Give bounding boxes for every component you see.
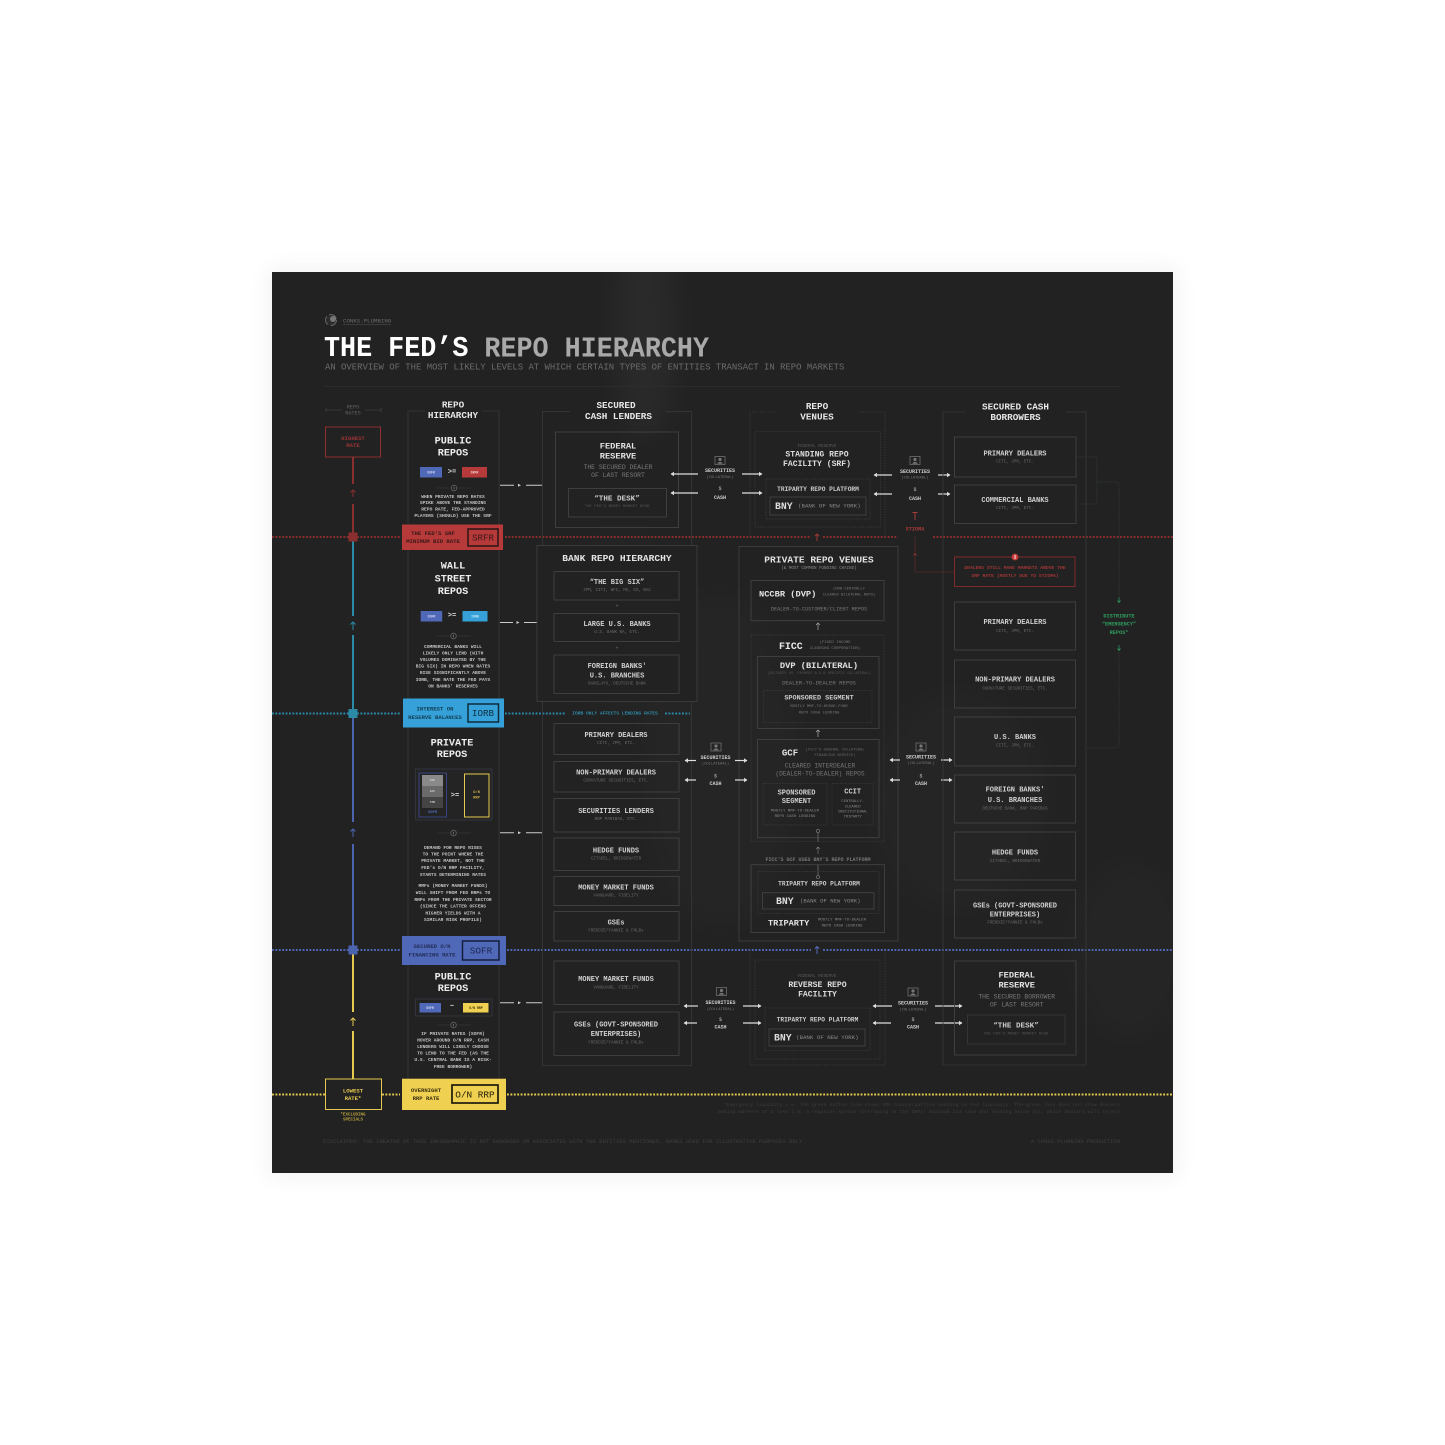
flow: securities and cash, middle right: CASH xyxy=(915,781,927,787)
large us banks box: U.S. BANK NA, ETC. xyxy=(594,631,640,635)
public repos tier: >= xyxy=(448,469,456,477)
wall street repos tier: COMMERCIAL BANKS WILL xyxy=(424,644,482,650)
heading: CASH LENDERS xyxy=(585,411,652,422)
FICC panel: CLEARING CORPORATION) xyxy=(810,646,860,651)
triparty box: MOSTLY MMF-TO-DEALER xyxy=(818,918,867,922)
connector arrows from hierarchy to lenders xyxy=(500,484,542,1004)
GCF box: SPONSORED xyxy=(778,790,815,798)
private repos tier: FED's O/N RRP FACILITY, xyxy=(421,865,485,871)
flow: securities and cash, top left: SECURITIES xyxy=(705,468,735,474)
SOFR rate label xyxy=(402,936,506,965)
heading: HIERARCHY xyxy=(428,410,479,421)
private repos tier: REPOS xyxy=(437,750,467,761)
public repos tier: PLAYERS (SHOULD) USE THE SRF xyxy=(414,513,492,519)
GCF to tripartry connector xyxy=(816,829,820,878)
GSEs borrower: FREDDIE/FANNIE & FHLBs xyxy=(987,920,1043,925)
private repos tier: PRIVATE MARKET, NOT THE xyxy=(421,858,485,864)
dotted rate lines xyxy=(272,537,1173,1094)
standing repo facility panel xyxy=(755,432,881,527)
wall street repos tier: BIG SIX) IN REPO WHEN RATES xyxy=(416,664,490,670)
IORB note: IORB ONLY AFFECTS LENDING RATES xyxy=(572,710,658,716)
flow: securities and cash, top right xyxy=(874,456,950,502)
federal reserve borrower: THE FED'S MONEY MARKET DESK xyxy=(984,1031,1049,1036)
primary dealers borrower: PRIMARY DEALERS xyxy=(983,619,1047,627)
IORB rate label xyxy=(403,698,504,728)
NCCBR box: CLEARED BILATERAL REPO) xyxy=(823,592,875,597)
GSEs lender: GSEs xyxy=(608,920,624,928)
private repos tier: DVP xyxy=(430,779,435,782)
hedge funds borrower: HEDGE FUNDS xyxy=(992,850,1038,858)
public repos lower tier: PUBLIC xyxy=(435,972,471,983)
public repos lower tier: U.S. CENTRAL BANK IS A RISK- xyxy=(414,1057,492,1063)
triparty box xyxy=(751,865,884,932)
federal reserve lender box: OF LAST RESORT xyxy=(591,472,645,479)
reverse repo facility panel: TRIPARTY REPO PLATFORM xyxy=(777,1016,859,1023)
emergency repos green path: DISTRIBUTE xyxy=(1103,613,1135,619)
flow: securities and cash, bottom right: SECURITIES xyxy=(898,1000,928,1006)
column: secured cash borrowers xyxy=(943,402,1086,1065)
private repos tier: TPR xyxy=(430,801,435,804)
private repos tier: SOFR xyxy=(428,811,438,815)
federal reserve lender box xyxy=(556,432,678,528)
GCF box xyxy=(758,740,879,838)
bank repo hierarchy panel: + xyxy=(615,603,619,609)
public repos lower tier: TO LEND TO THE FED (AS THE xyxy=(417,1051,489,1057)
DVP bilateral box: (DELIVERY VS. PAYMENT A.K.A SPECIFIC COLLATERAL) xyxy=(767,671,871,676)
private repos tier: WILL SHIFT FROM FED RRPs TO xyxy=(416,890,490,896)
footnote: making markets at a loss i.e. a negative spread (borrowing at the SRFs' minimum bid rate and lending below it), which dealers will reject xyxy=(718,1109,1120,1115)
highest rate box: HIGHEST xyxy=(341,435,365,442)
flow: securities and cash, middle right: SECURITIES xyxy=(906,754,936,760)
heading: REPO xyxy=(806,401,829,412)
GSEs borrower xyxy=(954,890,1076,938)
public repos tier: REPOS xyxy=(438,448,468,459)
NCCBR box xyxy=(751,580,884,621)
bank repo hierarchy panel: BANK REPO HIERARCHY xyxy=(562,553,672,564)
triparty box: BNY xyxy=(776,896,794,907)
SOFR rate label: FINANCING RATE xyxy=(408,952,456,959)
wall street repos tier: RISE SIGNIFICANTLY ABOVE xyxy=(420,670,486,676)
primary dealers lender: PRIMARY DEALERS xyxy=(584,732,648,740)
DVP bilateral box: REPO CASH LENDING xyxy=(799,711,840,715)
primary dealers lender: CITI, JPM, ETC. xyxy=(597,742,635,746)
DVP bilateral box: SPONSORED SEGMENT xyxy=(784,695,854,703)
primary dealers borrower top: CITI, JPM, ETC. xyxy=(996,460,1034,464)
flow: securities and cash, bottom left: CASH xyxy=(714,1024,727,1030)
public repos lower tier: ~ xyxy=(450,1003,454,1011)
heading: VENUES xyxy=(800,412,834,423)
bank repo hierarchy panel: + xyxy=(615,645,619,651)
O/N RRP rate label: RRP RATE xyxy=(413,1095,440,1102)
private repos tier: GCF xyxy=(430,790,435,793)
GCF box: SEGMENT xyxy=(782,798,811,806)
flow: securities and cash, top right: CASH xyxy=(909,496,921,502)
heading: SECURED CASH xyxy=(982,402,1049,413)
public repos lower tier: SOFR xyxy=(426,1006,434,1010)
us banks borrower xyxy=(954,717,1076,766)
triparty box: (BANK OF NEW YORK) xyxy=(800,897,860,904)
flow: securities and cash, top left: $ xyxy=(718,486,722,492)
hedge funds borrower xyxy=(954,832,1076,880)
level-up arrows on venue lines xyxy=(815,534,819,954)
title: THE FED’S REPO HIERARCHY xyxy=(324,332,710,365)
GCF box: FINANCING SERVICE) xyxy=(814,753,856,758)
public repos tier xyxy=(414,436,492,519)
DVP bilateral box: DVP (BILATERAL) xyxy=(780,661,858,671)
lowest rate box xyxy=(326,1079,382,1122)
flow: securities and cash, middle left: SECURITIES xyxy=(700,755,731,761)
flow: securities and cash, top left xyxy=(671,456,762,501)
reverse repo facility panel xyxy=(750,950,885,1065)
flow: securities and cash, top left: (COLLATERAL) xyxy=(706,475,734,480)
DVP bilateral box: DEALER-TO-DEALER REPOS xyxy=(782,680,857,687)
SRFR rate label: THE FED'S SRF xyxy=(411,530,455,537)
brand logo and handle xyxy=(326,314,392,326)
standing repo facility panel: (BANK OF NEW YORK) xyxy=(798,502,861,509)
public repos tier: REPO RATE, FED-APPROVED xyxy=(421,507,485,513)
federal reserve lender box: FEDERAL xyxy=(600,442,636,452)
dealer stigma callout: SRF RATE (MOSTLY DUE TO STIGMA) xyxy=(971,573,1059,579)
FICC panel: (FIXED INCOME xyxy=(819,640,851,645)
federal reserve borrower: OF LAST RESORT xyxy=(990,1002,1044,1009)
SRFR rate label: SRFR xyxy=(472,533,495,544)
flow: securities and cash, middle right xyxy=(890,743,952,787)
federal reserve lender box: “THE DESK” xyxy=(594,496,640,504)
GCF box: (DEALER-TO-DEALER) REPOS xyxy=(775,771,865,778)
foreign banks box: FOREIGN BANKS' xyxy=(588,663,646,671)
O/N RRP rate label: O/N RRP xyxy=(455,1089,495,1100)
GCF box: (FICC'S GENERAL COLLATERAL xyxy=(805,747,865,752)
private repos tier: (SINCE THE LATTER OFFERS xyxy=(420,903,486,909)
column: repo venues xyxy=(739,401,898,1065)
flow: securities and cash, top right: (COLLATERAL) xyxy=(901,475,929,480)
O/N RRP rate label xyxy=(402,1079,506,1110)
heading xyxy=(585,400,652,422)
public repos lower tier: FREE BORROWER) xyxy=(434,1064,472,1070)
securities lenders: BNP PARIBAS, ETC. xyxy=(595,818,637,822)
flow: securities and cash, top left: CASH xyxy=(714,495,726,501)
hedge funds lender: CITADEL, BRIDGEWATER xyxy=(591,857,642,861)
heading: REPO xyxy=(442,400,465,411)
footnote: *Emergency liquidity i.e. the green dotted line shows SRF counterparties seeding on Fed liquidity. The green line does not show dealers xyxy=(724,1102,1120,1108)
poster background xyxy=(272,220,1190,1173)
poster shadow xyxy=(268,268,1177,1177)
hedge funds lender xyxy=(554,838,679,870)
commercial banks borrower xyxy=(954,485,1076,524)
standing repo facility panel: FACILITY (SRF) xyxy=(783,460,851,469)
flow: securities and cash, middle left: $ xyxy=(714,773,717,779)
private repos tier: STARTS DETERMINING RATES xyxy=(420,872,486,878)
wall street repos tier: VOLUMES DOMINATED BY THE xyxy=(420,657,486,663)
standing repo facility panel: STANDING REPO xyxy=(785,450,849,459)
IORB rate label: INTEREST ON xyxy=(417,706,453,713)
private repos tier: PRIVATE xyxy=(431,738,473,749)
column: secured cash lenders xyxy=(537,400,697,1065)
primary dealers borrower top xyxy=(954,437,1076,477)
GCF box: TRIPARTY xyxy=(844,815,863,819)
private repos tier: RRPs FROM THE PRIVATE SECTOR xyxy=(414,897,492,903)
public repos lower tier: REPOS xyxy=(438,984,468,995)
non-primary dealers lender xyxy=(554,762,679,792)
production credit: A CONKS.PLUMBING PRODUCTION xyxy=(1031,1138,1120,1145)
GSEs lender: FREDDIE/FANNIE & FHLBs xyxy=(588,928,644,933)
primary dealers borrower: CITI, JPM, ETC. xyxy=(996,630,1034,634)
private repos tier: >= xyxy=(451,792,459,800)
public repos tier: SRFR xyxy=(471,470,478,474)
highest rate box: RATE xyxy=(346,442,360,449)
footnote xyxy=(718,1102,1120,1115)
lowest rate box: *EXCLUDING xyxy=(340,1112,366,1117)
flow: securities and cash, bottom left xyxy=(684,988,761,1030)
reverse repo facility panel: FEDERAL RESERVE xyxy=(798,974,837,979)
GCF box: CENTRALLY- xyxy=(841,800,864,804)
IORB rate label: IORB xyxy=(472,708,495,719)
stigma marker xyxy=(906,512,954,572)
wall street repos tier: WALL xyxy=(441,561,465,572)
flow: securities and cash, bottom right: (COLLATERAL) xyxy=(899,1007,927,1012)
flow: securities and cash, middle right: (COLLATERAL) xyxy=(907,761,935,766)
SRFR rate label: MINIMUM BID RATE xyxy=(406,538,460,545)
emergency repos green path: “EMERGENCY” xyxy=(1102,621,1136,627)
GSEs borrower: GSEs (GOVT-SPONSORED xyxy=(973,903,1057,911)
private repos tier: DEMAND FOR REPO RISES xyxy=(424,845,482,851)
lowest rate box: SPECIALS xyxy=(343,1118,364,1122)
emergency repos green path xyxy=(1076,457,1136,748)
private repos tier: SIMILAR RISK PROFILE) xyxy=(424,917,482,923)
triparty box: REPO CASH LENDING xyxy=(822,924,863,928)
GSEs lower lender: ENTERPRISES) xyxy=(591,1031,641,1039)
GCF box: REPO CASH LENDING xyxy=(775,815,816,819)
federal reserve borrower: THE SECURED BORROWER xyxy=(978,994,1055,1001)
non-primary dealers borrower xyxy=(954,660,1076,708)
private repo venues panel xyxy=(739,546,898,941)
GSEs lender xyxy=(554,912,679,941)
foreign banks borrower xyxy=(954,775,1076,823)
heading xyxy=(428,400,479,421)
NCCBR box: NCCBR (DVP) xyxy=(759,589,816,599)
primary dealers borrower top: PRIMARY DEALERS xyxy=(983,451,1047,459)
primary dealers borrower xyxy=(954,602,1076,650)
federal reserve borrower: “THE DESK” xyxy=(993,1023,1039,1031)
IORB rate label: RESERVE BALANCES xyxy=(408,714,462,721)
GCF box: INSTITUTIONAL xyxy=(838,810,868,814)
private repos tier: O/N xyxy=(473,790,481,795)
public repos tier: SPIKE ABOVE THE STANDING xyxy=(420,500,486,506)
foreign banks borrower: FOREIGN BANKS' xyxy=(986,787,1044,795)
securities lenders: SECURITIES LENDERS xyxy=(578,808,654,816)
federal reserve borrower: RESERVE xyxy=(998,981,1035,991)
big six box: JPM, CITI, WFC, MS, GS, BAC xyxy=(583,589,651,593)
non-primary dealers lender: CURVATURE SECURITIES, ETC. xyxy=(583,779,649,783)
federal reserve borrower xyxy=(954,961,1076,1055)
column: repo rates axis xyxy=(326,404,382,1122)
private repo venues panel: (& MOST COMMON FUNDING CHAINS) xyxy=(781,566,857,571)
private repos tier: RRP xyxy=(473,796,481,800)
flow: securities and cash, middle left: CASH xyxy=(709,781,722,787)
big six box: “THE BIG SIX” xyxy=(590,579,644,587)
FICC panel: FICC xyxy=(779,641,803,652)
wall street repos tier: IORB, THE RATE THE FED PAYS xyxy=(416,677,490,683)
primary dealers lender xyxy=(554,724,679,754)
public repos lower tier: LENDERS WILL LIKELY CHOOSE xyxy=(417,1044,489,1050)
federal reserve borrower: FEDERAL xyxy=(998,971,1035,981)
money market funds lower lender: VANGUARD, FIDELITY xyxy=(593,986,639,990)
private repo venues panel: FICC'S GCF USES BNY'S REPO PLATFORM xyxy=(765,857,871,863)
public repos tier: PUBLIC xyxy=(435,436,471,447)
foreign banks box xyxy=(554,655,679,694)
lowest rate box: RATE* xyxy=(345,1095,361,1102)
brand logo and handle: CONKS.PLUMBING xyxy=(343,317,392,324)
repo rates heading xyxy=(326,404,381,416)
wall street repos tier: ON BANKS' RESERVES xyxy=(428,683,478,689)
DVP bilateral box: MOSTLY MMF-TO-HEDGE-FUND xyxy=(790,705,848,709)
reverse repo facility panel: FACILITY xyxy=(798,990,837,999)
flow: securities and cash, middle left xyxy=(685,743,747,787)
repo rates heading: RATES xyxy=(345,410,361,416)
GCF box: CLEARED INTERDEALER xyxy=(785,763,856,770)
flow: securities and cash, top right: SECURITIES xyxy=(900,469,930,475)
private repo venues panel: PRIVATE REPO VENUES xyxy=(764,554,874,565)
flow: securities and cash, bottom right: CASH xyxy=(907,1024,919,1030)
non-primary dealers lender: NON-PRIMARY DEALERS xyxy=(576,770,656,778)
GCF box: MOSTLY MMF-TO-DEALER xyxy=(771,809,820,813)
flow: securities and cash, bottom left: (COLLATERAL) xyxy=(707,1007,734,1012)
wall street repos tier: LIKELY ONLY LEND (WITH xyxy=(423,650,484,656)
large us banks box: LARGE U.S. BANKS xyxy=(583,621,651,629)
repo rates heading: REPO xyxy=(347,404,359,410)
foreign banks borrower: U.S. BRANCHES xyxy=(988,797,1042,805)
large us banks box xyxy=(554,614,679,642)
NCCBR box: DEALER-TO-CUSTOMER/CLIENT REPOS xyxy=(771,606,867,612)
wall street repos tier: SOFR xyxy=(428,614,435,618)
public repos tier: SOFR xyxy=(427,470,435,474)
flow: securities and cash, bottom left: SECURITIES xyxy=(705,1000,736,1006)
private repos tier: MMFs (MONEY MARKET FUNDS) xyxy=(419,883,487,889)
wall street repos tier xyxy=(416,561,490,689)
emergency repos green path: REPOS* xyxy=(1110,630,1128,636)
stigma marker: STIGMA xyxy=(906,526,925,532)
disclaimer: DISCLAIMER: THE CREATOR OF THIS INFOGRAPHIC IS NOT ENDORSED OR ASSOCIATED WITH THE ENTITIES MENTIONED. NAMES USED FOR ILLUSTRATIVE PURPOSES ONLY. xyxy=(323,1138,806,1145)
flow: securities and cash, bottom right: $ xyxy=(911,1017,915,1023)
non-primary dealers borrower: NON-PRIMARY DEALERS xyxy=(975,677,1055,685)
GCF box: CCIT xyxy=(844,789,861,797)
public repos lower tier: O/N RRP xyxy=(469,1006,483,1010)
public repos lower tier xyxy=(414,972,492,1070)
flow: securities and cash, top right: $ xyxy=(913,487,917,493)
non-primary dealers borrower: CURVATURE SECURITIES, ETC. xyxy=(982,687,1048,691)
standing repo facility panel: TRIPARTY REPO PLATFORM xyxy=(777,486,859,493)
O/N RRP rate label: OVERNIGHT xyxy=(411,1087,442,1094)
public repos lower tier: HOVER AROUND O/N RRP, CASH xyxy=(417,1038,489,1044)
hedge funds lender: HEDGE FUNDS xyxy=(593,848,639,856)
triparty box: TRIPARTY xyxy=(768,918,810,928)
money market funds lender xyxy=(554,876,679,906)
private repos tier: TO THE POINT WHERE THE xyxy=(423,852,484,858)
private repos tier: HIGHER YIELDS WITH A xyxy=(425,910,481,916)
foreign banks box: BARCLAYS, DEUTSCHE BANK xyxy=(588,682,646,686)
foreign banks borrower: DEUTSCHE BANK, BNP PARIBAS xyxy=(982,807,1048,811)
us banks borrower: CITI, JPM, ETC. xyxy=(996,744,1034,748)
GCF box: CLEARED xyxy=(845,805,861,809)
SRFR rate label xyxy=(402,524,503,550)
public repos tier: WHEN PRIVATE REPO RATES xyxy=(421,494,485,500)
federal reserve lender box: RESERVE xyxy=(600,452,636,462)
rate axis line xyxy=(350,457,356,1079)
SOFR rate label: SECURED O/N xyxy=(414,943,450,950)
SOFR rate label: SOFR xyxy=(470,945,493,956)
bank repo hierarchy panel xyxy=(537,546,697,702)
public repos lower tier: IF PRIVATE RATES (SOFR) xyxy=(421,1031,485,1037)
commercial banks borrower: COMMERCIAL BANKS xyxy=(981,497,1049,505)
wall street repos tier: IORB xyxy=(471,614,479,618)
flow: securities and cash, bottom left: $ xyxy=(719,1017,722,1023)
money market funds lower lender xyxy=(554,961,679,1004)
heading xyxy=(982,402,1049,423)
money market funds lender: MONEY MARKET FUNDS xyxy=(578,885,654,893)
securities lenders xyxy=(554,798,679,832)
GSEs lower lender: GSEs (GOVT-SPONSORED xyxy=(574,1022,658,1030)
big six box xyxy=(554,572,679,600)
reverse repo facility panel: BNY xyxy=(774,1032,792,1043)
hedge funds borrower: CITADEL, BRIDGEWATER xyxy=(990,860,1041,864)
wall street repos tier: >= xyxy=(448,612,456,620)
FICC panel xyxy=(751,635,884,842)
reverse repo facility panel: REVERSE REPO xyxy=(788,981,847,990)
flow: securities and cash, bottom right xyxy=(873,988,962,1030)
commercial banks borrower: CITI, JPM, ETC. xyxy=(996,507,1034,511)
GSEs lower lender xyxy=(554,1012,679,1056)
highest rate box xyxy=(326,427,380,457)
us banks borrower: U.S. BANKS xyxy=(994,734,1036,742)
federal reserve lender box: THE SECURED DEALER xyxy=(583,464,653,471)
flow: securities and cash, middle left: (COLLATERAL) xyxy=(702,761,729,766)
heading: BORROWERS xyxy=(990,412,1041,423)
heading: SECURED xyxy=(596,400,636,411)
reverse repo facility panel: (BANK OF NEW YORK) xyxy=(796,1034,859,1041)
GSEs borrower: ENTERPRISES) xyxy=(990,912,1040,920)
dealer stigma callout: DEALERS STILL MAKE MARKETS ABOVE THE xyxy=(964,565,1066,571)
money market funds lower lender: MONEY MARKET FUNDS xyxy=(578,976,654,984)
dealer stigma callout xyxy=(954,554,1075,586)
lowest rate box: LOWEST xyxy=(343,1087,364,1094)
axis nodes xyxy=(348,532,358,954)
GSEs lower lender: FREDDIE/FANNIE & FHLBs xyxy=(588,1040,644,1045)
GCF box: GCF xyxy=(782,749,798,759)
heading xyxy=(800,401,834,423)
wall street repos tier: REPOS xyxy=(438,587,468,598)
wall street repos tier: STREET xyxy=(435,574,471,585)
flow: securities and cash, middle right: $ xyxy=(919,773,923,779)
NCCBR box: (NON-CENTRALLY xyxy=(833,586,866,591)
money market funds lender: VANGUARD, FIDELITY xyxy=(593,894,639,898)
triparty box: TRIPARTY REPO PLATFORM xyxy=(778,881,860,888)
standing repo facility panel: FEDERAL RESERVE xyxy=(798,444,837,449)
subtitle: AN OVERVIEW OF THE MOST LIKELY LEVELS AT WHICH CERTAIN TYPES OF ENTITIES TRANSACT IN REPO MARKETS xyxy=(325,363,844,373)
foreign banks box: U.S. BRANCHES xyxy=(590,673,644,681)
standing repo facility panel: BNY xyxy=(775,501,793,512)
private repos tier xyxy=(414,738,492,923)
federal reserve lender box: THE FED'S MONEY MARKET DESK xyxy=(585,504,650,509)
column: repo hierarchy xyxy=(402,400,506,1110)
DVP bilateral box xyxy=(758,656,879,728)
